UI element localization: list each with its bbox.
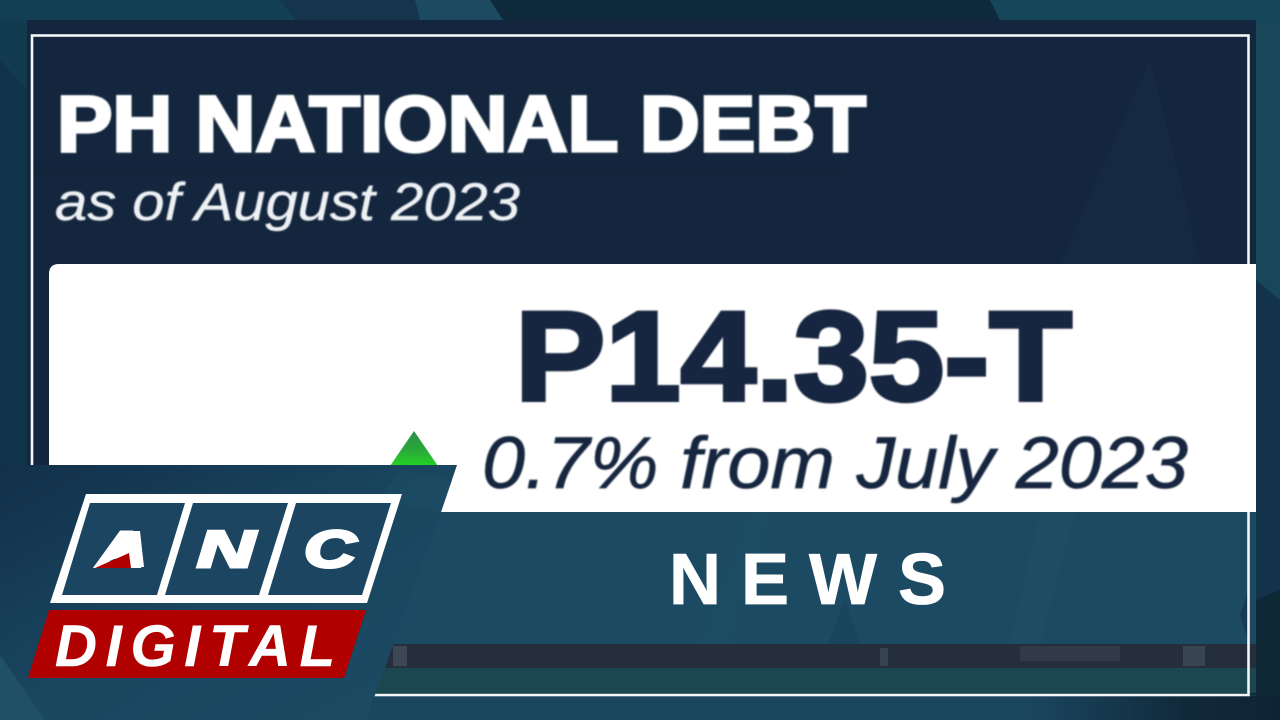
logo: ANC boxes: [50, 494, 402, 603]
letter N: N: [197, 521, 257, 579]
letter A: A: [93, 521, 145, 579]
news label: E: [741, 540, 789, 620]
debt value: P14.35-T: [515, 285, 1072, 427]
icon: green up arrow: [390, 431, 438, 466]
news label: S: [898, 540, 946, 620]
change from July 2023: 0.7% from July 2023: [482, 423, 1188, 504]
city strip: [370, 644, 1256, 694]
logo: digital banner: DIGITAL: [55, 614, 335, 679]
panel: news band: [370, 512, 1256, 645]
news label: N: [669, 540, 721, 620]
letter A fill and red swoosh: [95, 531, 144, 568]
panel: dark header background: [27, 20, 1256, 480]
title: PH NATIONAL DEBT: [57, 79, 866, 168]
subtitle: as of August 2023: [55, 173, 521, 232]
letter C: C: [304, 521, 358, 579]
news label: W: [809, 540, 877, 620]
panel: logo tag: [0, 465, 457, 720]
